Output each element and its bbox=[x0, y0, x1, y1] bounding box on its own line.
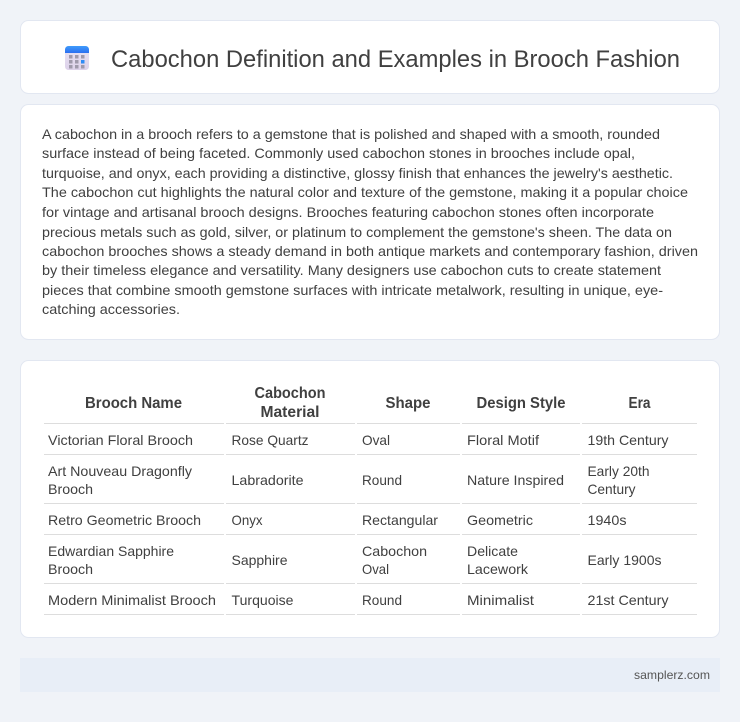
description text: precious metals such as gold, silver, or platinum to complement the gemstone's sheen. The data on bbox=[42, 224, 672, 240]
table header: Design Style bbox=[476, 395, 566, 412]
table header: Shape bbox=[386, 395, 431, 412]
row: Retro Geometric Brooch: Onyx bbox=[232, 512, 262, 528]
footer bbox=[20, 658, 720, 692]
description text: cabochon brooches shows a steady demand in both antique markets and contemporary fashion, driven bbox=[42, 243, 698, 259]
row: Modern Minimalist Brooch: 21st Century bbox=[588, 592, 668, 608]
description text: by their timeless elegance and versatility. Many designers use cabochon cuts to create statement bbox=[42, 262, 661, 278]
row: Modern Minimalist Brooch: Minimalist bbox=[467, 592, 534, 608]
table header: Material bbox=[260, 404, 320, 421]
row: Art Nouveau Dragonfly Brooch: Labradorite bbox=[232, 472, 304, 488]
row: Retro Geometric Brooch: Geometric bbox=[467, 512, 533, 528]
row: Victorian Floral Brooch: Victorian Floral Brooch bbox=[48, 432, 193, 448]
table header: Brooch Name bbox=[85, 395, 182, 412]
row: Victorian Floral Brooch: 19th Century bbox=[588, 432, 668, 448]
row: Retro Geometric Brooch bbox=[48, 512, 626, 528]
row: Retro Geometric Brooch: 1940s bbox=[588, 512, 626, 528]
row: Victorian Floral Brooch: Oval bbox=[362, 432, 390, 448]
description text: A cabochon in a brooch refers to a gemstone that is polished and shaped with a smooth, rounded bbox=[42, 126, 660, 142]
row: Art Nouveau Dragonfly Brooch: Early 20th bbox=[588, 463, 650, 479]
description text: catching accessories. bbox=[42, 301, 180, 317]
row: Retro Geometric Brooch: Retro Geometric Brooch bbox=[48, 512, 201, 528]
row: Art Nouveau Dragonfly Brooch: Round bbox=[362, 472, 402, 488]
row: Art Nouveau Dragonfly Brooch: Nature Inspired bbox=[467, 472, 564, 488]
footer text: samplerz.com bbox=[634, 668, 710, 682]
description text: for vintage and artisanal brooch designs. Brooches featuring cabochon stones often incorporate bbox=[42, 204, 654, 220]
row: Edwardian Sapphire Brooch: Brooch bbox=[48, 561, 93, 577]
row: Retro Geometric Brooch: Rectangular bbox=[362, 512, 438, 528]
row: Art Nouveau Dragonfly Brooch bbox=[48, 463, 650, 497]
description text bbox=[42, 126, 698, 317]
row: Modern Minimalist Brooch: Round bbox=[362, 592, 402, 608]
row: Victorian Floral Brooch: Floral Motif bbox=[467, 432, 539, 448]
row: Art Nouveau Dragonfly Brooch: Brooch bbox=[48, 481, 93, 497]
table header: Cabochon bbox=[254, 385, 326, 402]
row: Art Nouveau Dragonfly Brooch: Century bbox=[588, 481, 636, 497]
description text: The cabochon cut highlights the natural color and texture of the gemstone, making it a popular choice bbox=[42, 184, 688, 200]
description text: pieces that combine smooth gemstone surfaces with intricate metalwork, resulting in unique, eye- bbox=[42, 282, 663, 298]
row: Edwardian Sapphire Brooch: Delicate bbox=[467, 543, 518, 559]
row: Victorian Floral Brooch bbox=[48, 432, 668, 448]
description text: turquoise, and onyx, each providing a distinctive, glossy finish that enhances the jewelry's aesthetic. bbox=[42, 165, 673, 181]
description text: surface instead of being faceted. Commonly used cabochon stones in brooches include opal, bbox=[42, 145, 635, 161]
row: Modern Minimalist Brooch: Modern Minimalist Brooch bbox=[48, 592, 216, 608]
description panel bbox=[20, 104, 720, 340]
row: Edwardian Sapphire Brooch: Cabochon bbox=[362, 543, 427, 559]
table panel bbox=[20, 360, 720, 638]
table header: Era bbox=[628, 395, 651, 412]
title: Cabochon Definition and Examples in Brooch Fashion bbox=[111, 46, 680, 73]
row: Edwardian Sapphire Brooch: Oval bbox=[362, 561, 389, 577]
title panel bbox=[20, 20, 720, 94]
row: Edwardian Sapphire Brooch: Edwardian Sapphire bbox=[48, 543, 174, 559]
row: Edwardian Sapphire Brooch bbox=[48, 543, 662, 577]
row: Edwardian Sapphire Brooch: Lacework bbox=[467, 561, 529, 577]
row: Modern Minimalist Brooch bbox=[48, 592, 668, 608]
icon: calendar bbox=[65, 46, 89, 70]
row: Edwardian Sapphire Brooch: Sapphire bbox=[232, 552, 288, 568]
row: Edwardian Sapphire Brooch: Early 1900s bbox=[588, 552, 662, 568]
row: Victorian Floral Brooch: Rose Quartz bbox=[232, 432, 308, 448]
table header bbox=[85, 385, 651, 421]
row: Art Nouveau Dragonfly Brooch: Art Nouveau Dragonfly bbox=[48, 463, 192, 479]
row: Modern Minimalist Brooch: Turquoise bbox=[232, 592, 294, 608]
